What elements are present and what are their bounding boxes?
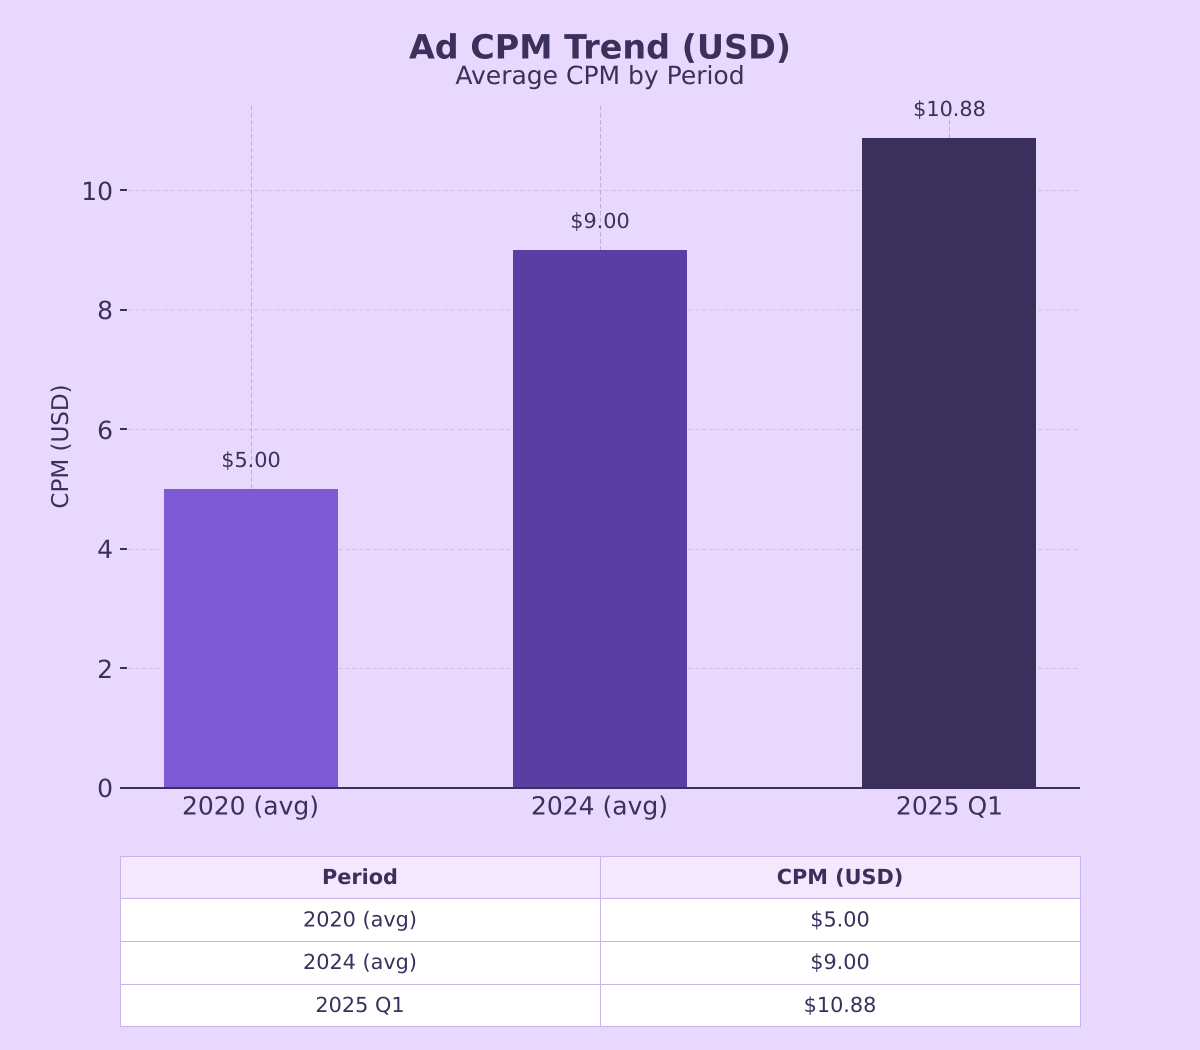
value label: 2025: $10.88 <box>913 97 986 121</box>
data table: $9.00 <box>810 950 870 974</box>
data table: 2020 (avg) <box>303 908 417 932</box>
y axis tick labels: 8 <box>97 296 113 325</box>
y axis tick labels: 0 <box>97 774 113 803</box>
bar: 2025 Q1 <box>862 138 1036 788</box>
value label: 2020: $5.00 <box>221 448 281 472</box>
data table: $5.00 <box>810 908 870 932</box>
bar: 2020 (avg) <box>164 489 338 788</box>
bar chart <box>48 97 1080 820</box>
subtitle: Average CPM by Period <box>455 61 745 90</box>
y axis tick labels: 4 <box>97 535 113 564</box>
y axis tick labels: 6 <box>97 416 113 445</box>
value label: 2024: $9.00 <box>570 209 630 233</box>
title: Ad CPM Trend (USD) <box>409 28 791 66</box>
y axis tick labels <box>81 177 113 803</box>
data table: Period <box>322 865 398 889</box>
data table <box>120 856 1080 1027</box>
data table: $10.88 <box>804 993 876 1017</box>
y axis tick labels: 10 <box>81 177 113 206</box>
y axis tick labels: 2 <box>97 655 113 684</box>
y axis ticks <box>120 190 127 668</box>
x axis line <box>120 787 1080 789</box>
data table: 2024 (avg) <box>303 950 417 974</box>
x axis tick labels <box>182 792 1003 820</box>
y axis title: CPM (USD) <box>48 384 74 509</box>
table header <box>120 856 1080 898</box>
bar: 2024 (avg) <box>513 250 687 788</box>
x axis tick labels: 2020 (avg) <box>182 792 319 820</box>
data table: CPM (USD) <box>777 865 903 889</box>
data table: 2025 Q1 <box>315 993 405 1017</box>
x axis tick labels: 2025 Q1 <box>896 792 1003 820</box>
x axis tick labels: 2024 (avg) <box>531 792 668 820</box>
